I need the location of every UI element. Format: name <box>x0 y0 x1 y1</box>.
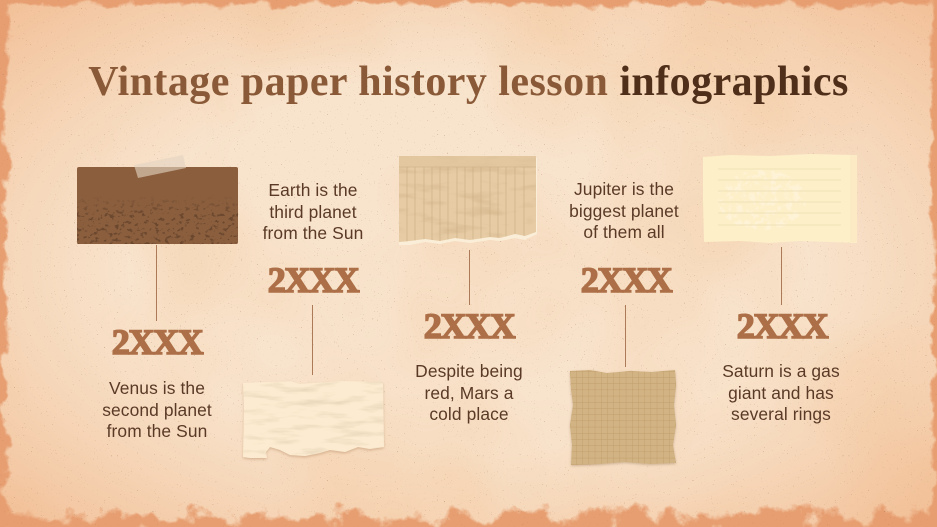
connector line: Earth <box>312 305 313 375</box>
text: Jupiter <box>569 179 679 242</box>
panel: brown paper with tape <box>77 155 238 244</box>
text: Saturn <box>722 361 840 424</box>
text: Earth: from the Sun <box>263 223 363 243</box>
text: Saturn: Saturn is a gas <box>722 361 840 381</box>
text: Earth <box>262 180 363 243</box>
title: Vintage paper history lesson infographics <box>88 59 849 105</box>
year: Jupiter: 2XXX <box>581 260 671 300</box>
text: Jupiter: of them all <box>583 222 665 242</box>
year: Earth: 2XXX <box>268 260 358 300</box>
text: Earth: Earth is the <box>268 180 358 200</box>
text: Earth: third planet <box>269 202 357 222</box>
connector line: Saturn <box>781 247 782 305</box>
text: Venus: from the Sun <box>107 421 207 441</box>
panel: torn cream paper <box>242 381 385 460</box>
year: Saturn: 2XXX <box>737 306 827 346</box>
text: Mars <box>415 361 523 424</box>
panel: graph paper <box>569 370 677 467</box>
panel: ruled tan paper <box>399 156 537 245</box>
connector line: Venus <box>156 245 157 321</box>
text: Saturn: several rings <box>731 404 831 424</box>
text: Venus <box>102 378 212 441</box>
text: Venus: Venus is the <box>109 378 205 398</box>
year: Venus: 2XXX <box>112 322 202 362</box>
connector line: Jupiter <box>625 305 626 367</box>
text: Jupiter: Jupiter is the <box>574 179 674 199</box>
text: Mars: red, Mars a <box>424 382 514 402</box>
text: Mars: Despite being <box>415 361 523 381</box>
text: Mars: cold place <box>429 404 509 424</box>
text: Saturn: giant and has <box>728 382 834 402</box>
year: Mars: 2XXX <box>424 306 514 346</box>
connector line: Mars <box>469 250 470 305</box>
text: Jupiter: biggest planet <box>569 200 679 220</box>
text: Venus: second planet <box>102 400 212 420</box>
panel: yellow notebook paper <box>703 154 857 243</box>
